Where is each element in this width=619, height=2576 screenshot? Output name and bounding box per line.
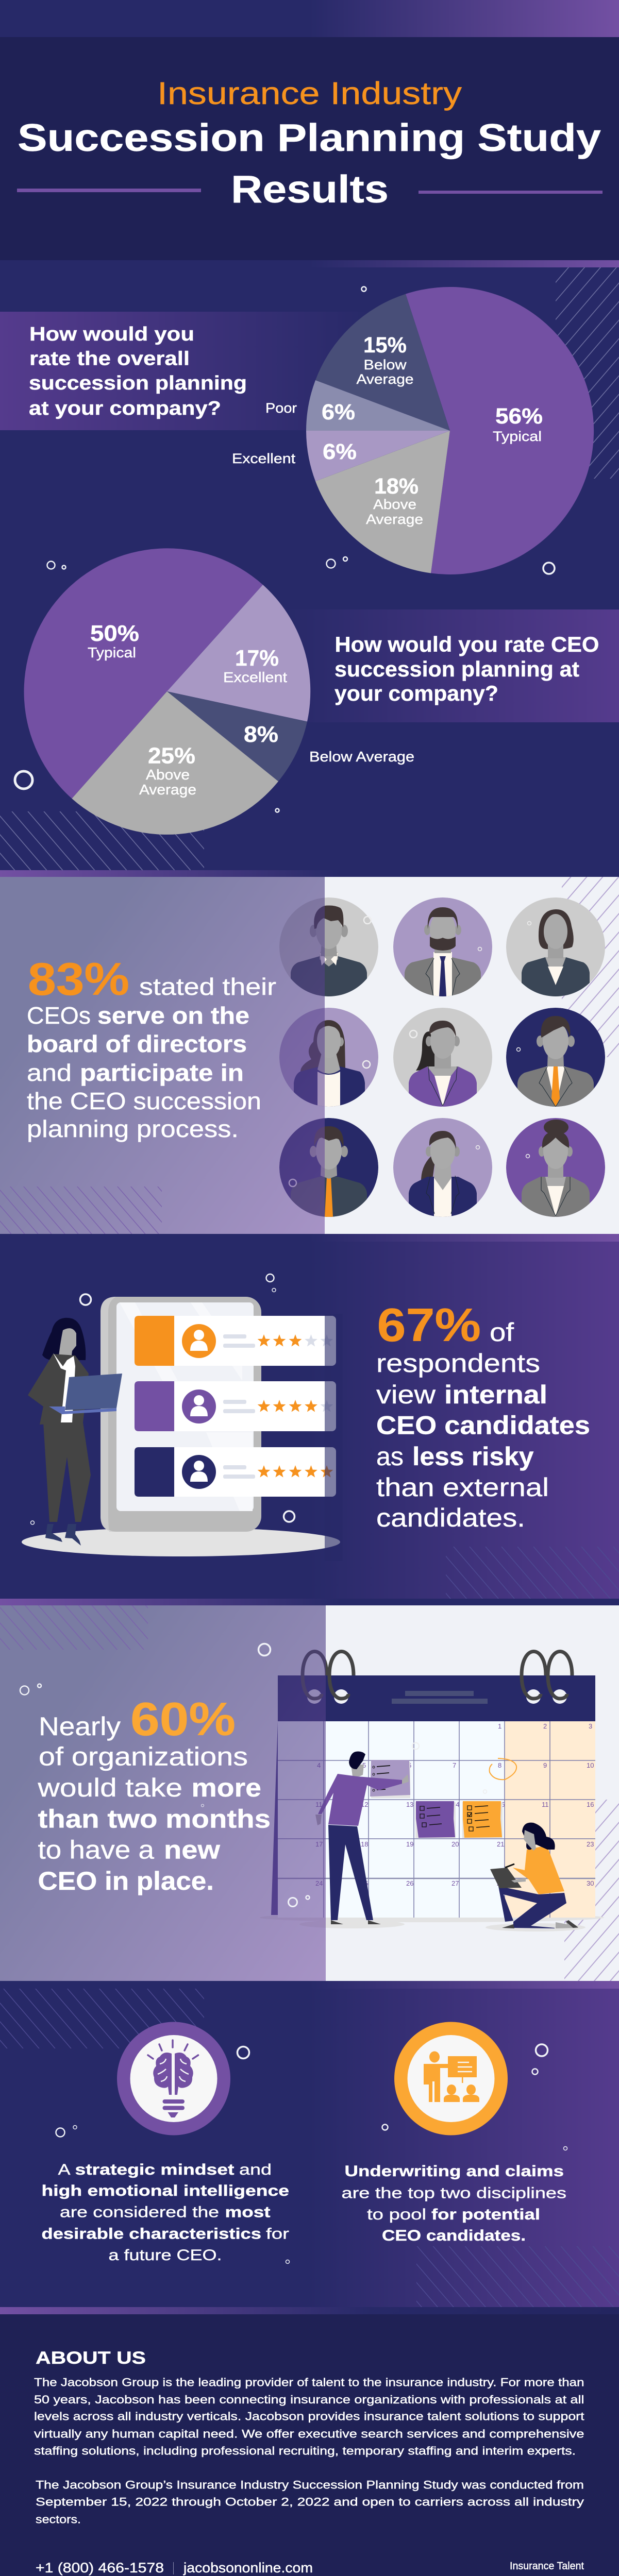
pie chart: overall succession planning: 18% — [374, 474, 419, 499]
title: Results: Results — [231, 167, 389, 211]
translucent left overlay — [0, 1605, 326, 1981]
stat text: 67%: CEO candidates — [376, 1411, 590, 1439]
stat text: 67%: 67% — [377, 1299, 481, 1351]
stat text: 67%: view — [376, 1380, 436, 1409]
stat text: 67%: less risky — [412, 1442, 534, 1471]
illustration: floor shadows — [260, 1913, 604, 1931]
stat text: 60%: 60% — [130, 1693, 236, 1745]
portrait: man with orange tie and grey suit — [506, 1008, 605, 1109]
title rule right — [419, 191, 603, 194]
illustration: wall calendar: 7 — [453, 1761, 456, 1769]
pie chart: overall succession planning: 56% — [495, 404, 543, 429]
stat text: 83%: serve on the — [97, 1002, 249, 1029]
stat text: 67%: respondents — [376, 1349, 540, 1378]
question band: overall succession planning — [0, 312, 371, 430]
stat text: 83%: board of directors — [27, 1030, 247, 1057]
text block: strategic mindset: are considered the — [60, 2204, 219, 2221]
logo: Jacobson Insurance Talent: Insurance Talent — [510, 2561, 584, 2572]
panel: 67% internal candidates — [0, 1234, 619, 1599]
about paragraph one: 50 years, Jacobson has been connecting insurance organizations with professionals at all — [34, 2393, 584, 2406]
question band: CEO succession planning: succession planning at — [334, 657, 579, 681]
illustration: wall calendar: 5 — [362, 1761, 366, 1769]
pie chart: overall succession planning: 15% — [363, 333, 407, 358]
logo: Jacobson Insurance Talent — [397, 2561, 584, 2576]
text block: strategic mindset: and — [239, 2161, 272, 2178]
question band: overall succession planning: succession planning — [29, 372, 247, 394]
stat text: 60%: Nearly — [39, 1712, 121, 1741]
stat text: 83%: planning process. — [27, 1115, 239, 1142]
rating card: three stars — [135, 1316, 336, 1366]
text block: strategic mindset: desirable characteristics — [41, 2226, 261, 2242]
stat text: 67% — [376, 1299, 590, 1532]
stat text: 83%: the CEO succession — [27, 1088, 261, 1114]
question band: overall succession planning: rate the overall — [29, 348, 190, 370]
portrait: man with sweater — [279, 897, 378, 998]
illustration: wall calendar: 10 — [587, 1761, 594, 1769]
illustration: phone with rating cards — [101, 1297, 343, 1561]
illustration: wall calendar: 11 — [315, 1801, 323, 1808]
illustration: wall calendar: 2 — [543, 1722, 547, 1730]
illustration: wall calendar: 14 — [452, 1801, 459, 1808]
hand-drawn circle around date 8 — [490, 1758, 516, 1780]
about paragraph two: The Jacobson Group’s Insurance Industry Succession Planning Study was conducted from — [36, 2478, 584, 2492]
portrait: woman with long wavy hair — [279, 1008, 378, 1109]
question band: overall succession planning: at your company? — [29, 398, 221, 419]
stat text: 60% — [37, 1693, 271, 1895]
stat text: 60%: than two months — [38, 1804, 271, 1833]
text block: underwriting and claims — [341, 2163, 566, 2244]
text block: strategic mindset: a future CEO. — [108, 2247, 222, 2264]
stat text: 60%: of organizations — [39, 1742, 248, 1771]
pie chart: CEO succession planning: 50% — [90, 621, 139, 646]
illustration: wall calendar: 24 — [315, 1879, 323, 1887]
illustration: wall calendar: 8 — [498, 1761, 501, 1769]
panel: 83% CEOs on the board — [0, 877, 619, 1234]
pie chart: overall succession planning — [232, 287, 594, 574]
pie chart: overall succession planning: Average — [366, 512, 423, 527]
question band: overall succession planning: How would you — [29, 324, 194, 345]
stat text: 67%: as — [376, 1442, 404, 1471]
about paragraph two — [36, 2478, 584, 2526]
pie chart: overall succession planning: Average — [357, 371, 413, 387]
illustration: wall calendar: 22 — [542, 1840, 549, 1848]
illustration: wall calendar: 15 — [497, 1801, 505, 1808]
stat text: 60%: to have a — [38, 1835, 154, 1864]
illustration: wall calendar: 6 — [408, 1761, 411, 1769]
illustration: floor ellipse — [22, 1528, 340, 1556]
illustration: wall calendar: 25 — [361, 1879, 368, 1887]
text block: underwriting and claims: are the top two disciplines — [341, 2184, 566, 2202]
illustration: wall calendar: 12 — [361, 1801, 368, 1808]
pie chart: CEO succession planning: Average — [139, 782, 196, 798]
illustration: wall calendar — [271, 1652, 595, 1918]
contact details — [36, 2560, 313, 2575]
contact details: +1 (800) 466-1578 — [36, 2560, 164, 2575]
pie chart: CEO succession planning — [24, 548, 414, 835]
pie chart: overall succession planning: Below — [364, 357, 407, 372]
question band: CEO succession planning: How would you rate CEO — [335, 632, 599, 656]
illustration: wall calendar: 27 — [451, 1879, 459, 1887]
panel: pie chart section — [0, 260, 619, 870]
stat text: 83%: stated their — [139, 973, 276, 1000]
illustration: man placing note on calendar — [315, 1752, 409, 1924]
portrait: woman with short hair — [506, 897, 605, 998]
pie chart: overall succession planning: Poor — [265, 400, 297, 416]
stat text: 83% — [27, 953, 276, 1142]
pie chart: CEO succession planning: Above — [146, 767, 190, 783]
text block: strategic mindset: for — [266, 2226, 289, 2242]
illustration: kneeling woman with clipboard — [490, 1823, 578, 1928]
title rule left — [17, 189, 201, 192]
stat text: 60%: more — [192, 1773, 261, 1802]
panel: characteristics and disciplines — [0, 1981, 619, 2307]
title: Succession Planning Study: Succession Planning Study — [18, 116, 601, 159]
panel: about us footer — [0, 2314, 619, 2576]
stat text: 83%: and — [27, 1059, 72, 1086]
rating card: four stars — [135, 1381, 336, 1431]
icon: presenter and audience — [394, 2022, 508, 2135]
text block: strategic mindset: high emotional intelligence — [41, 2182, 289, 2199]
title: Insurance Industry: Insurance Industry — [157, 76, 462, 111]
text block: underwriting and claims: to pool — [367, 2206, 426, 2223]
sticky note: lilac checklist — [370, 1760, 410, 1798]
illustration: wall calendar: 16 — [587, 1801, 594, 1808]
header panel — [0, 0, 619, 260]
pie chart: CEO succession planning: Typical — [88, 645, 136, 660]
illustration: wall calendar: 21 — [497, 1840, 504, 1848]
illustration: wall calendar: 11 — [542, 1801, 548, 1808]
sticky note: purple checklist — [415, 1801, 456, 1838]
stat text: 83%: participate in — [80, 1059, 244, 1086]
about paragraph one: virtually any human capital need. We offer executive search services and comprehensive — [34, 2428, 584, 2440]
pie chart: CEO succession planning: Below Average — [309, 749, 414, 765]
illustration: wall calendar: 23 — [587, 1840, 594, 1848]
illustration: wall calendar: 19 — [406, 1840, 413, 1848]
pie chart: CEO succession planning: 8% — [244, 722, 278, 747]
about paragraph two: September 15, 2022 through October 2, 2022 and open to carriers across all industry — [36, 2496, 584, 2508]
stat text: 67%: candidates. — [376, 1503, 525, 1532]
about paragraph one: levels across all industry verticals. Jacobson provides insurance talent solutions to support — [34, 2410, 584, 2422]
pie chart: overall succession planning: Typical — [493, 429, 542, 444]
text block: underwriting and claims: for potential — [431, 2206, 540, 2223]
illustration: wall calendar: 13 — [406, 1801, 413, 1808]
sticky note: orange checklist — [462, 1801, 503, 1838]
pie chart: overall succession planning: 6% — [323, 439, 357, 464]
illustration: wall calendar: 29 — [542, 1879, 549, 1887]
illustration: wall calendar: 28 — [497, 1879, 504, 1887]
pie chart: overall succession planning: Above — [373, 497, 416, 512]
question band: CEO succession planning: your company? — [334, 681, 498, 705]
about heading: ABOUT US — [36, 2348, 146, 2368]
illustration: wall calendar: 4 — [317, 1761, 321, 1769]
pie chart: CEO succession planning: 17% — [235, 646, 279, 671]
illustration: wall calendar: 20 — [451, 1840, 459, 1848]
text block: strategic mindset: strategic mindset — [75, 2161, 234, 2178]
stat text: 67%: internal — [444, 1380, 547, 1409]
stat text: 60%: new — [164, 1835, 220, 1864]
pie chart: overall succession planning: Excellent — [232, 451, 296, 466]
illustration: wall calendar: 30 — [587, 1879, 594, 1887]
text block: underwriting and claims: CEO candidates. — [382, 2227, 526, 2244]
translucent left overlay — [0, 877, 325, 1234]
text block: underwriting and claims: Underwriting and claims — [344, 2163, 564, 2180]
illustration: wall calendar: 1 — [498, 1722, 501, 1730]
stat text: 60%: CEO in place. — [38, 1867, 214, 1895]
portrait: woman with hair bun — [506, 1118, 605, 1219]
pie chart: CEO succession planning: 25% — [148, 743, 195, 769]
illustration: wall calendar: 17 — [315, 1840, 323, 1848]
illustration: wall calendar: 26 — [406, 1879, 413, 1887]
question band: CEO succession planning — [283, 609, 619, 722]
stat text: 83%: 83% — [28, 953, 129, 1005]
portrait: man with orange tie and dark jacket — [279, 1118, 378, 1219]
portrait: woman with ponytail and purple jacket — [393, 1008, 492, 1109]
stat text: 67%: than external — [376, 1473, 549, 1502]
about paragraph one: The Jacobson Group is the leading provider of talent to the insurance industry. For more than — [34, 2376, 584, 2388]
text block: strategic mindset — [41, 2161, 289, 2264]
icon: lightbulb brain — [117, 2022, 230, 2135]
illustration: wall calendar: 9 — [543, 1761, 547, 1769]
illustration: wall calendar: 3 — [589, 1722, 592, 1730]
stat text: 60%: would take — [37, 1773, 182, 1802]
pie chart: overall succession planning: 6% — [322, 400, 355, 425]
stat text: 67%: of — [490, 1318, 514, 1347]
portrait: bearded man with navy tie — [393, 897, 492, 998]
illustration: businesswoman with laptop — [28, 1318, 122, 1546]
stat text: 83%: CEOs — [27, 1002, 91, 1029]
text block: strategic mindset: most — [225, 2204, 270, 2221]
illustration: wall calendar: 18 — [361, 1840, 368, 1848]
top gradient band — [0, 0, 619, 37]
panel: 60% take more than two months — [0, 1605, 619, 1981]
text block: strategic mindset: A — [58, 2161, 70, 2178]
rating card: five stars — [135, 1447, 336, 1497]
about paragraph one: staffing solutions, including professional recruiting, temporary staffing and interim experts. — [34, 2444, 576, 2458]
pie chart: CEO succession planning: Excellent — [223, 669, 287, 685]
about paragraph one — [34, 2376, 584, 2458]
portrait: woman with ponytail and navy jacket — [393, 1118, 492, 1219]
about paragraph two: sectors. — [36, 2513, 81, 2526]
contact details: jacobsononline.com — [183, 2560, 313, 2575]
